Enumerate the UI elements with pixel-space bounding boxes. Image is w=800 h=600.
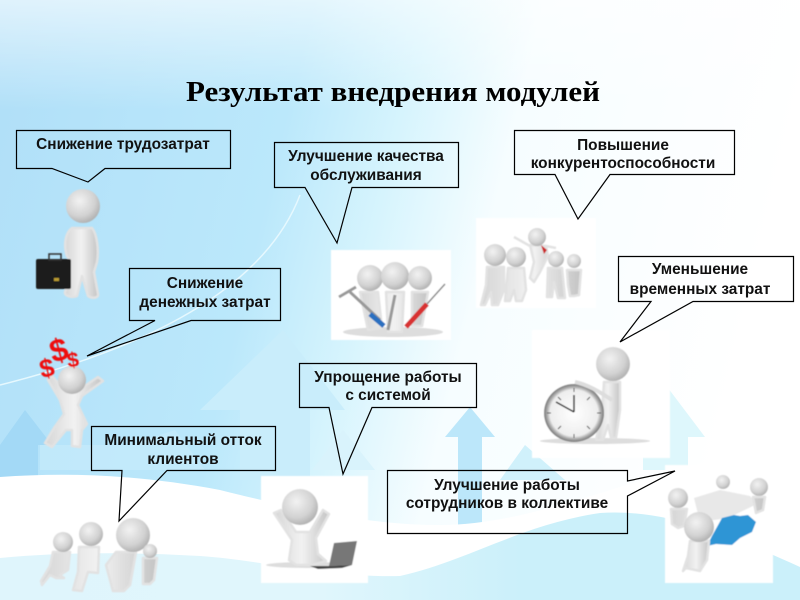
icon: clock	[544, 382, 612, 442]
callout: Упрощение работы с системой: Упрощение работы	[314, 369, 462, 386]
title: Результат внедрения модулей	[186, 77, 600, 108]
callout: Минимальный отток клиентов	[92, 426, 276, 521]
callout: Минимальный отток клиентов: Минимальный отток	[104, 432, 262, 449]
callout: Повышение конкурентоспособности	[514, 130, 734, 219]
callout: Снижение денежных затрат	[87, 268, 280, 356]
callout: Уменьшение временных затрат	[618, 256, 794, 342]
callout: Улучшение работы сотрудников в коллективе: сотрудников в коллективе	[406, 495, 609, 512]
icon: blue puzzle piece	[707, 515, 756, 546]
callout: Улучшение качества обслуживания	[274, 142, 458, 243]
callout: Минимальный отток клиентов: клиентов	[147, 451, 219, 468]
callout: Повышение конкурентоспособности: конкурентоспособности	[531, 155, 715, 172]
photo: person with clock	[532, 330, 670, 458]
callout: Снижение денежных затрат: денежных затрат	[139, 294, 271, 311]
background arrows	[0, 330, 705, 525]
photo: person with laptop	[261, 476, 368, 583]
icon: dollar signs: $	[66, 348, 81, 373]
icon: dollar signs: $	[37, 352, 58, 384]
icon: dollar signs: $	[45, 330, 72, 370]
callout: Снижение трудозатрат: Снижение трудозатрат	[36, 136, 210, 153]
photo: team with tools	[331, 250, 451, 340]
callout: Повышение конкурентоспособности: Повышение	[577, 137, 669, 154]
callout: Уменьшение временных затрат: Уменьшение	[652, 261, 749, 278]
icon: briefcase	[36, 254, 71, 289]
photo: competing group	[476, 218, 596, 308]
photo: worker with briefcase	[36, 189, 100, 298]
photo: girl with money	[37, 330, 103, 447]
photo: running group	[41, 518, 157, 591]
photo: puzzle team	[665, 465, 773, 583]
white wave	[0, 440, 800, 600]
icon: dollar signs	[37, 330, 81, 384]
callout: Уменьшение временных затрат: временных затрат	[630, 281, 771, 298]
callout: Улучшение качества обслуживания: Улучшение качества	[288, 148, 444, 165]
callout: Снижение денежных затрат: Снижение	[167, 275, 244, 292]
callout: Упрощение работы с системой: с системой	[345, 387, 431, 404]
icon: laptop	[310, 541, 357, 569]
callout: Улучшение работы сотрудников в коллективе	[388, 470, 675, 534]
callout: Улучшение работы сотрудников в коллективе: Улучшение работы	[434, 477, 580, 494]
callout: Улучшение качества обслуживания: обслуживания	[310, 167, 422, 184]
callout: Упрощение работы с системой	[300, 364, 476, 474]
callout: Снижение трудозатрат	[16, 130, 230, 182]
